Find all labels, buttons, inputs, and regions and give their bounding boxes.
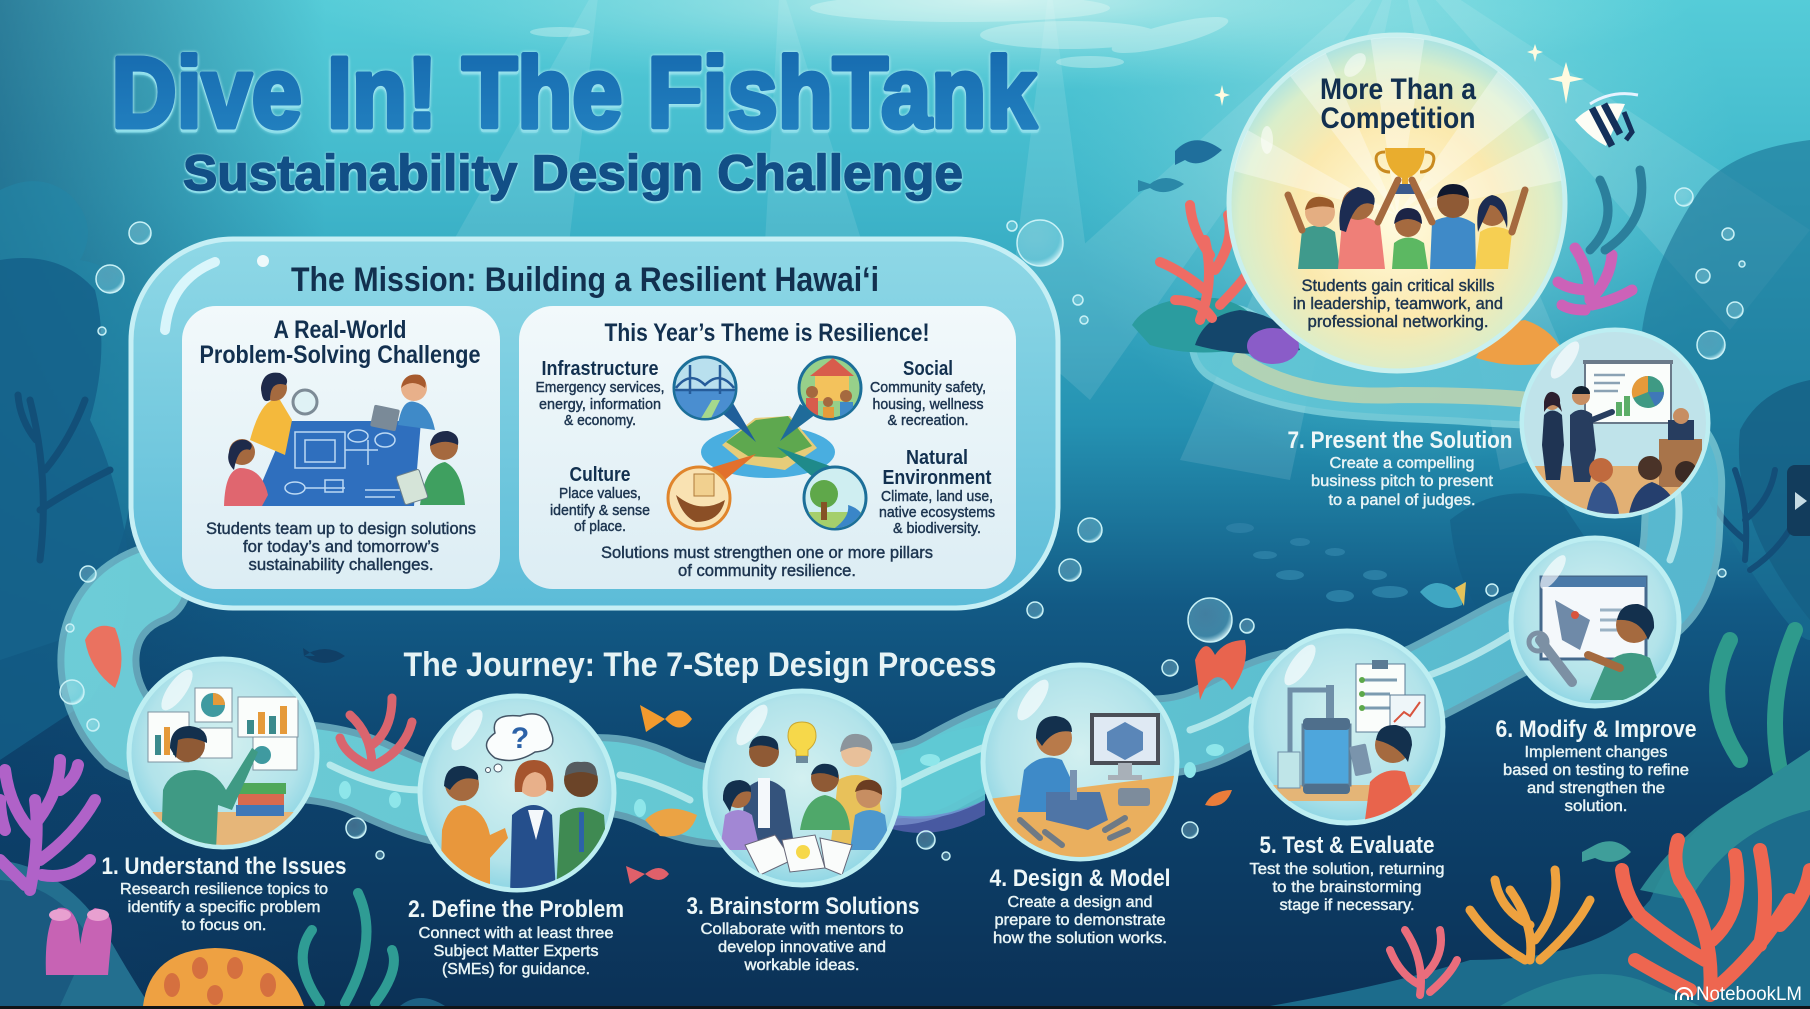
step 7 text xyxy=(1288,427,1512,509)
card: this year's theme is resilience xyxy=(519,306,1016,589)
step 1 bubble: understand the issues xyxy=(129,659,320,852)
pillar: infrastructure: energy, information xyxy=(539,396,661,413)
title: Dive In! The FishTank xyxy=(112,37,1037,149)
pillar: natural environment: Climate, land use, xyxy=(881,488,993,505)
card heading: A Real-World xyxy=(274,316,406,344)
viewer tab at right edge xyxy=(1787,465,1810,536)
step 3 text: 3. Brainstorm Solutions xyxy=(686,893,920,920)
pillar: culture: of place. xyxy=(574,518,626,535)
step 6 text: based on testing to refine xyxy=(1503,762,1689,779)
step 2 text xyxy=(408,896,624,978)
icon: infrastructure bridge xyxy=(674,357,736,420)
card body text: Students team up to design solutions xyxy=(206,520,476,538)
black strip at bottom edge xyxy=(0,1006,1810,1009)
card: real-world problem-solving challenge xyxy=(182,306,500,589)
step 7 text: Create a compelling xyxy=(1330,455,1474,472)
step 6 text xyxy=(1496,716,1696,815)
step 5 text: Test the solution, returning xyxy=(1250,861,1444,878)
water ribbon connecting the seven steps xyxy=(98,345,1684,833)
panel: the mission bubble xyxy=(131,239,1058,608)
heading: competition: More Than a xyxy=(1320,73,1476,106)
illustration: team with trophy xyxy=(1288,148,1525,269)
reef silhouettes left xyxy=(0,181,157,760)
step 1 text xyxy=(102,853,346,934)
step 1 text: to focus on. xyxy=(182,917,266,934)
sun rays inside bubble xyxy=(1230,35,1570,215)
illustration: students around a blueprint xyxy=(224,373,465,506)
heading: competition xyxy=(1320,73,1476,135)
theme summary: of community resilience. xyxy=(678,562,856,580)
step 4 text xyxy=(990,865,1170,947)
step 2 text: Subject Matter Experts xyxy=(434,943,598,960)
reef silhouettes right xyxy=(1450,140,1810,640)
step 1 text: 1. Understand the Issues xyxy=(102,853,346,880)
step 2 text: Connect with at least three xyxy=(418,925,614,942)
pillar: natural environment: Natural xyxy=(906,447,968,469)
step 2 bubble: define the problem: ? xyxy=(511,722,529,755)
coral and small fish mid band xyxy=(85,626,1246,884)
heading: the journey: The Journey: The 7-Step Design Process xyxy=(404,646,996,684)
theme summary xyxy=(601,544,933,580)
pillar: infrastructure xyxy=(536,358,664,429)
step 6 text: Implement changes xyxy=(1524,744,1668,761)
step 2 bubble: define the problem xyxy=(420,696,614,895)
icon: social community house xyxy=(799,357,861,421)
step 7 bubble: present the solution xyxy=(1520,330,1710,526)
pillar: social: Social xyxy=(903,358,953,380)
pillar: infrastructure: Emergency services, xyxy=(536,379,664,396)
pillar: natural environment xyxy=(879,447,995,537)
heading: mission: The Mission: Building a Resilient Hawai‘i xyxy=(291,261,879,299)
step 1 text: identify a specific problem xyxy=(128,899,320,916)
pillar: natural environment: Environment xyxy=(882,467,992,489)
subtitle: Sustainability Design Challenge xyxy=(183,145,963,201)
pillar: social xyxy=(870,358,986,429)
step 1 text: Research resilience topics to xyxy=(120,881,328,898)
pillar: infrastructure: Infrastructure xyxy=(542,358,658,380)
pillar: culture: Place values, xyxy=(559,485,641,502)
competition body text: in leadership, teamwork, and xyxy=(1293,294,1503,313)
step 3 text xyxy=(686,893,920,974)
card heading xyxy=(200,316,481,369)
corals around the competition bubble xyxy=(1132,170,1642,365)
step 6 bubble: modify and improve xyxy=(1511,538,1679,706)
step 4 bubble: design and model xyxy=(980,665,1180,860)
step 5 text: to the brainstorming xyxy=(1272,879,1422,896)
panel: more than a competition xyxy=(1229,35,1570,371)
step 2 text: (SMEs) for guidance. xyxy=(442,961,590,978)
icon: culture canoe xyxy=(668,467,730,529)
diagram: island with four pillars xyxy=(668,357,866,532)
scattered air bubbles xyxy=(60,188,1745,860)
competition body text: professional networking. xyxy=(1308,312,1488,331)
step 4 text: 4. Design & Model xyxy=(990,865,1170,892)
pillar: social: housing, wellness xyxy=(872,396,984,413)
card heading: Problem-Solving Challenge xyxy=(200,341,481,369)
card body text xyxy=(206,520,476,574)
step 2 text: 2. Define the Problem xyxy=(408,896,624,923)
pillar: natural environment: & biodiversity. xyxy=(893,520,981,537)
step 5 text: stage if necessary. xyxy=(1280,897,1414,914)
competition body text xyxy=(1293,276,1503,331)
heading: competition: Competition xyxy=(1320,102,1476,135)
corals and rocks bottom left xyxy=(0,760,445,1006)
theme heading: This Year’s Theme is Resilience! xyxy=(604,319,930,347)
step 5 bubble: test and evaluate xyxy=(1250,631,1450,823)
step 4 text: how the solution works. xyxy=(993,930,1167,947)
step 3 bubble: brainstorm solutions xyxy=(705,691,899,885)
seabed, kelp and corals bottom right xyxy=(1270,630,1810,1006)
card body text: for today’s and tomorrow’s xyxy=(243,538,439,556)
pillar: infrastructure: & economy. xyxy=(564,412,636,429)
step 4 text: Create a design and xyxy=(1008,894,1152,911)
theme summary: Solutions must strengthen one or more pillars xyxy=(601,544,933,562)
step 5 text: 5. Test & Evaluate xyxy=(1260,832,1434,859)
step 3 text: Collaborate with mentors to xyxy=(700,921,904,938)
NotebookLM watermark: NotebookLM xyxy=(1696,984,1802,1005)
step 3 text: develop innovative and xyxy=(718,939,886,956)
fish school and small fish right xyxy=(1138,44,1638,862)
step 7 text: business pitch to present xyxy=(1311,473,1494,490)
icon: natural environment tree and wave xyxy=(804,467,866,532)
step 7 text: 7. Present the Solution xyxy=(1288,427,1512,454)
pillar: natural environment: native ecosystems xyxy=(879,504,995,521)
competition body text: Students gain critical skills xyxy=(1302,276,1494,295)
pillar: culture xyxy=(550,464,650,535)
step 7 text: to a panel of judges. xyxy=(1328,492,1476,509)
step 5 text xyxy=(1250,832,1444,914)
pillar: social: Community safety, xyxy=(870,379,986,396)
step 6 text: 6. Modify & Improve xyxy=(1496,716,1696,743)
pillar: culture: identify & sense xyxy=(550,502,650,519)
step 3 text: workable ideas. xyxy=(743,957,860,974)
card body text: sustainability challenges. xyxy=(248,556,434,574)
pillar: culture: Culture xyxy=(570,464,630,486)
step 6 text: and strengthen the xyxy=(1527,780,1665,797)
step 6 text: solution. xyxy=(1564,798,1628,815)
step 4 text: prepare to demonstrate xyxy=(994,912,1166,929)
pillar: social: & recreation. xyxy=(888,412,968,429)
